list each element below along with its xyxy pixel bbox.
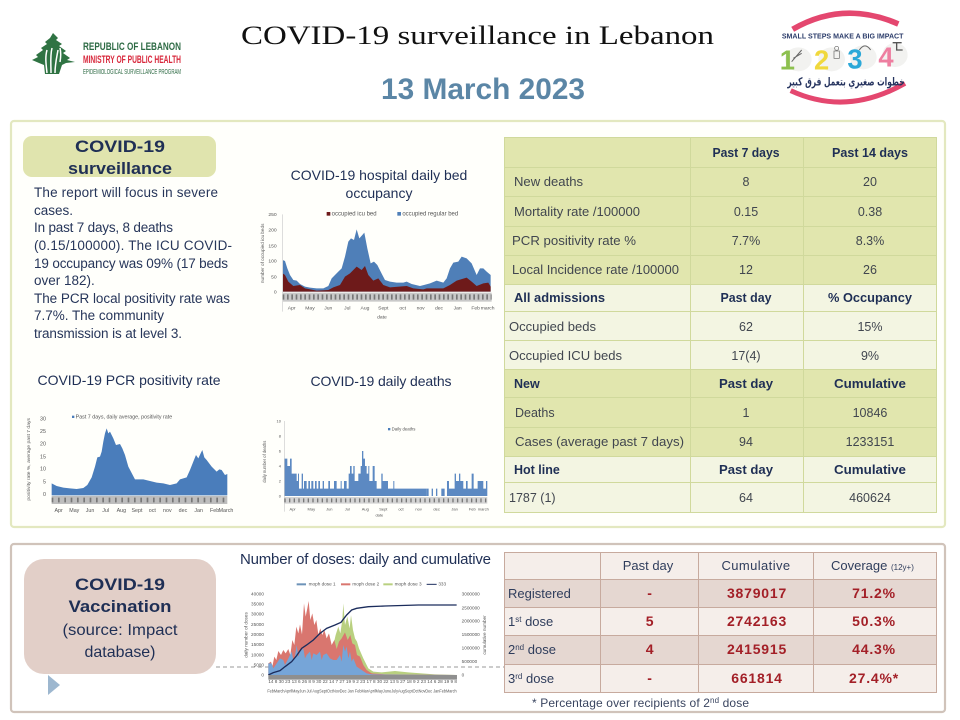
table text: dose [521,614,553,629]
logo: small steps make a big impact: خطوات صغيري بتعمل فرق كبير [787,74,905,88]
chart: number of doses: moph dose 3 [395,582,422,587]
logo: small steps make a big impact: 1 [780,44,795,75]
chart: hospital daily bed occupancy: Apr [288,305,296,311]
chart: daily deaths: 4 [279,463,282,468]
chart: number of doses: 5000 [254,662,264,667]
chart: number of doses: 2500000 [462,605,480,610]
table text: 2 [508,642,515,657]
chart: number of doses: 15000 [251,642,264,647]
chart: hospital daily bed occupancy: 250 [268,212,277,218]
table text: Occupied beds [509,320,596,334]
chart: PCR positivity rate: 5 [43,479,46,485]
chart: daily deaths: daily number of deaths [262,441,267,483]
chart: hospital daily bed occupancy: occupied regular bed [402,211,458,217]
heading: COVID-19 vaccination [24,559,216,674]
chart heading: bed occupancy: COVID-19 hospital daily bed [291,167,467,183]
heading: COVID-19 surveillance: COVID-19 [75,137,165,156]
logo: Ministry of Public Health [32,33,181,76]
chart: daily deaths [262,418,489,518]
chart: PCR positivity rate [26,415,233,514]
date heading: 13 March 2023 [381,73,585,106]
table row fills [504,552,936,692]
logo: small steps make a big impact: 4 [878,42,894,73]
chart: PCR positivity rate: 15 [40,454,46,460]
chart: hospital daily bed occupancy: 100 [268,259,277,265]
table text: 20 [863,175,877,189]
table text: Past day [719,377,773,391]
chart: PCR positivity rate: 25 [40,429,46,435]
chart: hospital daily bed occupancy: 50 [271,274,277,280]
chart: number of doses: 0 [261,672,264,677]
heading: COVID-19 vaccination: database) [84,644,156,661]
table text: Cases (average past 7 days) [515,435,684,449]
panel: COVID-19 vaccination [11,544,945,712]
table text: Occupied ICU beds [509,349,622,363]
chart: daily deaths: 2 [279,478,282,483]
chart: PCR positivity rate: Feb [210,508,219,514]
chart: hospital daily bed occupancy: date [377,314,387,320]
table text: All admissions [514,291,605,305]
table text [508,558,914,686]
logo: small steps make a big impact [780,13,908,102]
table: vaccination [504,552,936,692]
table text: 12 [739,263,753,277]
chart: hospital daily bed occupancy: Jan [454,305,462,311]
heading: COVID-19 vaccination: Vaccination [68,597,172,616]
table text: Coverage (12y+) [831,558,914,573]
table text: Registered [508,586,571,601]
chart: hospital daily bed occupancy: nov [417,305,425,311]
table text: Past day [720,291,772,305]
table row fills [504,137,936,512]
chart: daily deaths: 10 [277,418,282,423]
table text: New [514,377,540,391]
chart: number of doses: 1500000 [462,632,480,637]
table text: 2742163 [727,613,787,629]
table text: st [515,615,522,624]
chart: daily deaths: Sept [379,506,388,511]
text block: summary: 19 occupancy was 09% (17 beds [34,256,228,271]
chart: daily deaths: march [478,506,489,511]
table text: - [647,585,653,601]
chart: number of doses: FebMarchAprilMayJun Jul AugSeptOctNovDec Jan FebMarAprilMayJuneJulyAugSeptOctNovDec JanFebMarch [267,688,457,693]
chart: number of doses: cumulative number [482,615,487,655]
text block: summary: The PCR local positivity rate was [34,291,230,306]
table text: 15% [857,320,883,334]
heading: COVID-19 surveillance: surveillance [68,159,172,178]
table text: 62 [739,320,753,334]
logo text [83,41,181,76]
chart: daily deaths: nov [415,506,422,511]
chart: number of doses: 20000 [251,632,264,637]
table text: New deaths [514,175,583,189]
table text: 661814 [731,670,783,686]
table text: 8.3% [856,234,884,248]
chart: hospital daily bed occupancy: march [481,305,495,311]
chart: PCR positivity rate: 0 [43,492,46,498]
icon: cedar tree [32,33,75,74]
text block: summary: In past 7 days, 8 deaths [34,220,173,235]
text block: summary: cases. [34,203,73,218]
chart: hospital daily bed occupancy: May [305,305,315,311]
table text: 0.15 [734,205,758,219]
chart: PCR positivity rate: 10 [40,467,46,473]
chart: hospital daily bed occupancy: Jun [324,305,333,311]
table text: 9% [861,349,879,363]
chart: daily deaths: Jul [345,506,350,511]
table text: Cumulative [834,377,906,391]
table text [509,146,912,505]
table text: PCR positivity rate % [512,234,636,248]
chart: number of doses: moph dose 1 [309,582,336,587]
logo: small steps make a big impact: SMALL STEPS MAKE A BIG IMPACT [782,33,904,40]
chart: hospital daily bed occupancy: oct [399,305,407,311]
table: surveillance indicators [504,137,936,512]
table text: 1 [743,406,750,420]
chart: number of doses: 14 8 30 23 13 6 26 8 9 30 22 14 7 27 19 9 2 23 17 8 30 22 13 5 27 18 9 2 23 14 6 28 19 9 8 [268,679,457,684]
table text: Cumulative [834,463,906,477]
table text: 10846 [853,406,887,420]
chart: hospital daily bed occupancy: Feb [471,305,480,311]
logo: small steps make a big impact: 2 [814,44,829,75]
chart: number of doses: 3000000 [462,592,480,597]
chart: daily deaths: dec [433,506,440,511]
chart: daily deaths: Jan [451,506,458,511]
footnote: nd [710,696,719,705]
table text: 1787 (1) [509,491,556,505]
chart: hospital daily bed occupancy: dec [435,305,444,311]
chart: daily deaths: Jun [326,506,333,511]
chart: PCR positivity rate: Aug [117,508,126,514]
table text: 26 [863,263,877,277]
table text: rd [515,672,522,681]
table text: 3879017 [727,585,787,601]
table text: 1233151 [846,435,894,449]
chart heading: bed occupancy [291,167,467,201]
table text: 8 [743,175,750,189]
panel: COVID-19 surveillance [11,121,945,527]
chart: number of doses: 1000000 [462,645,480,650]
table text: Past day [623,558,674,573]
table text: 460624 [849,491,891,505]
chart: hospital daily bed occupancy: 0 [274,290,277,296]
chart: hospital daily bed occupancy: 200 [268,228,277,234]
chart: daily deaths: date [375,513,384,518]
table text: 2415915 [727,641,787,657]
title: COVID-19 surveillance in Lebanon [241,21,714,50]
chart: PCR positivity rate: Jun [86,508,94,514]
table text: nd [515,643,524,652]
table text: 64 [739,491,753,505]
chart: hospital daily bed occupancy [260,211,495,320]
text block: summary: over 182). [34,273,95,288]
text block: summary: 7.7%. The community [34,308,164,323]
table text: 7.7% [732,234,760,248]
table text: 0.38 [858,205,882,219]
table text: Local Incidence rate /100000 [512,263,679,277]
chart: number of doses: 25000 [251,622,264,627]
text block: summary: The report will focus in severe [34,185,218,200]
heading: COVID-19 surveillance [23,136,216,178]
text block: summary [34,185,232,341]
chart: daily deaths: Apr [290,506,296,511]
icon: triangle marker [48,675,60,695]
chart: number of doses: 40000 [251,592,264,597]
chart heading: PCR positivity rate: COVID-19 PCR positivity rate [38,372,221,388]
table text: - [647,670,653,686]
chart: PCR positivity rate: March [219,508,233,514]
text block: summary: (0.15/100000). The ICU COVID- [34,238,232,253]
chart: number of doses: 500000 [462,659,478,664]
table text: Cumulative [721,558,791,573]
table text: Hot line [514,463,560,477]
chart: number of doses: 333 [438,582,446,587]
table text: 50.3% [852,613,896,629]
chart: number of doses: 0 [462,672,465,677]
chart: hospital daily bed occupancy: Aug [361,305,370,311]
chart: PCR positivity rate: Jul [102,508,109,514]
table text: 94 [739,435,753,449]
chart: number of doses: 30000 [251,612,264,617]
footnote: dose [719,696,749,710]
table text: Past 14 days [832,146,908,160]
table text: % Occupancy [828,291,912,305]
table text: Past day [719,463,773,477]
table text: 3 [508,671,515,686]
chart: PCR positivity rate: nov [163,508,172,514]
chart: hospital daily bed occupancy: 150 [268,243,277,249]
chart: PCR positivity rate: oct [149,508,156,514]
chart: number of doses: 35000 [251,602,264,607]
table text: dose [524,642,556,657]
chart: hospital daily bed occupancy: Sept [378,305,389,311]
table text: 17(4) [731,349,761,363]
table text: 27.4%* [849,670,899,686]
chart: daily deaths: Aug [362,506,369,511]
chart heading: number of doses: Number of doses: daily and cumulative [240,551,491,568]
table text: 71.2% [852,585,896,601]
chart: number of doses [244,582,487,693]
table text: dose [522,671,554,686]
chart: daily deaths: Daily deaths [392,427,415,432]
chart: PCR positivity rate: positivity rate %, average past 7 days [26,418,32,501]
logo text: MINISTRY OF PUBLIC HEALTH [83,54,181,66]
chart: PCR positivity rate: Apr [55,508,63,514]
chart: PCR positivity rate: Jan [194,508,203,514]
chart: daily deaths: 0 [279,493,282,498]
chart: PCR positivity rate: 30 [40,416,46,422]
logo text: REPUBLIC OF LEBANON [83,41,181,53]
table text: Mortality rate /100000 [514,205,640,219]
chart: number of doses: daily number of doses [244,612,249,658]
chart heading: daily deaths: COVID-19 daily deaths [310,373,452,389]
chart: daily deaths: 8 [279,433,282,438]
table text: Past 7 days [712,146,780,160]
text block: summary: transmission is at level 3. [34,326,182,341]
chart: number of doses: 10000 [251,652,264,657]
table text: Deaths [515,406,555,420]
table text: 1 [508,614,515,629]
chart: daily deaths: May [308,506,315,511]
heading: COVID-19 vaccination: COVID-19 [75,575,165,594]
table text: 4 [646,641,654,657]
chart heading: bed occupancy: occupancy [346,185,412,201]
logo text: EPIDEMIOLOGICAL SURVEILLANCE PROGRAM [83,69,181,76]
chart: daily deaths: 6 [279,448,282,453]
chart: hospital daily bed occupancy: number of occupied icu beds [260,223,265,283]
chart: number of doses: 2000000 [462,619,480,624]
chart: hospital daily bed occupancy: occupied icu bed [332,211,377,217]
chart: daily deaths: oct [398,506,405,511]
logo: small steps make a big impact: 3 [847,43,863,74]
table text: 5 [646,613,654,629]
chart: PCR positivity rate: Past 7 days, daily average, positivity rate [76,415,172,421]
chart: PCR positivity rate: 20 [40,442,46,448]
heading: COVID-19 vaccination: (source: Impact [62,622,178,639]
table text: 44.3% [852,641,896,657]
chart: PCR positivity rate: May [69,508,80,514]
chart: daily deaths: Feb [469,506,477,511]
chart: number of doses: moph dose 2 [352,582,380,587]
chart: hospital daily bed occupancy: Jul [344,305,351,311]
footnote: * Percentage over recipients of 2 [532,696,710,710]
chart: PCR positivity rate: Sept [132,508,143,514]
chart: PCR positivity rate: dec [179,508,188,514]
